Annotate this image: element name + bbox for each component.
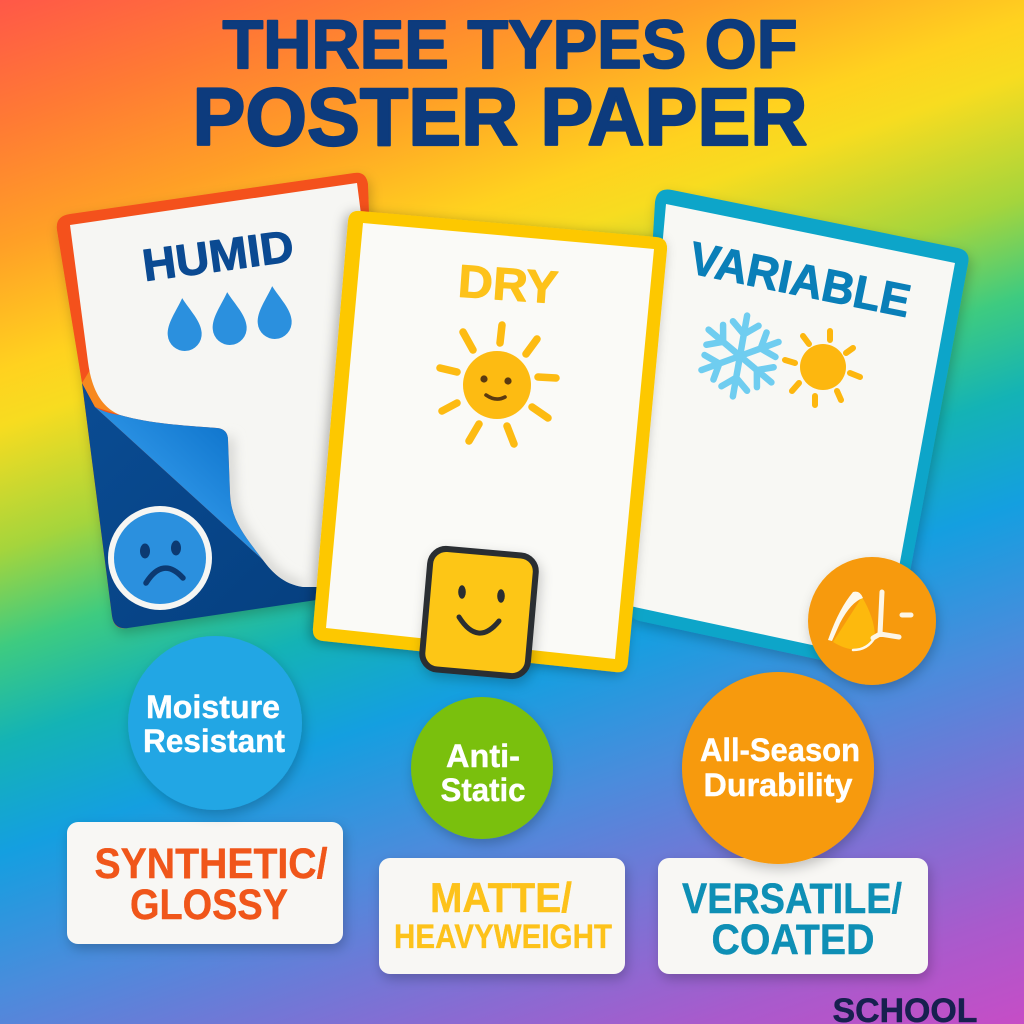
label: matte heavyweight: HEAVYWEIGHT — [394, 918, 612, 956]
heading: humid: HUMID — [139, 220, 297, 291]
icon: smiling square — [421, 548, 537, 677]
badge: all-season durability: Durability — [704, 767, 853, 803]
badge: all-season durability: All-Season — [700, 732, 860, 768]
badge: anti-static: Anti- — [446, 738, 520, 774]
heading: variable: VARIABLE — [685, 232, 915, 327]
label: matte heavyweight — [379, 858, 625, 974]
icon: small sun — [785, 331, 860, 405]
title — [192, 6, 808, 163]
badge: anti-static: Static — [440, 772, 526, 808]
heading: dry: DRY — [456, 255, 560, 313]
panel: dry card — [313, 211, 667, 677]
paper sheet — [70, 183, 372, 587]
title: THREE TYPES OF — [222, 6, 798, 83]
icon: smiling sun — [440, 325, 556, 444]
badge: moisture resistant — [128, 636, 302, 810]
panel: humid card — [57, 173, 372, 628]
badge: orange season icon — [808, 557, 936, 685]
folded corner — [95, 407, 263, 560]
panel: variable card — [630, 190, 969, 673]
label: versatile coated: VERSATILE/ — [682, 875, 902, 923]
badge: moisture resistant: Resistant — [143, 723, 285, 759]
badge: all-season durability — [682, 672, 874, 864]
dark underside — [82, 383, 330, 628]
icon: snowflake — [692, 308, 788, 404]
label: versatile coated — [658, 858, 928, 974]
badge: anti-static — [411, 697, 553, 839]
orange sliver — [82, 370, 120, 415]
label: synthetic glossy: SYNTHETIC/ — [94, 840, 328, 888]
label: synthetic glossy — [67, 822, 343, 944]
label: versatile coated: COATED — [712, 916, 874, 964]
icon: sad face — [108, 506, 212, 610]
label: matte heavyweight: MATTE/ — [430, 874, 572, 921]
label: synthetic glossy: GLOSSY — [130, 881, 288, 929]
icon: water drops — [165, 285, 293, 352]
title: POSTER PAPER — [192, 72, 808, 163]
badge: moisture resistant: Moisture — [146, 689, 280, 725]
curl shade — [228, 437, 303, 587]
